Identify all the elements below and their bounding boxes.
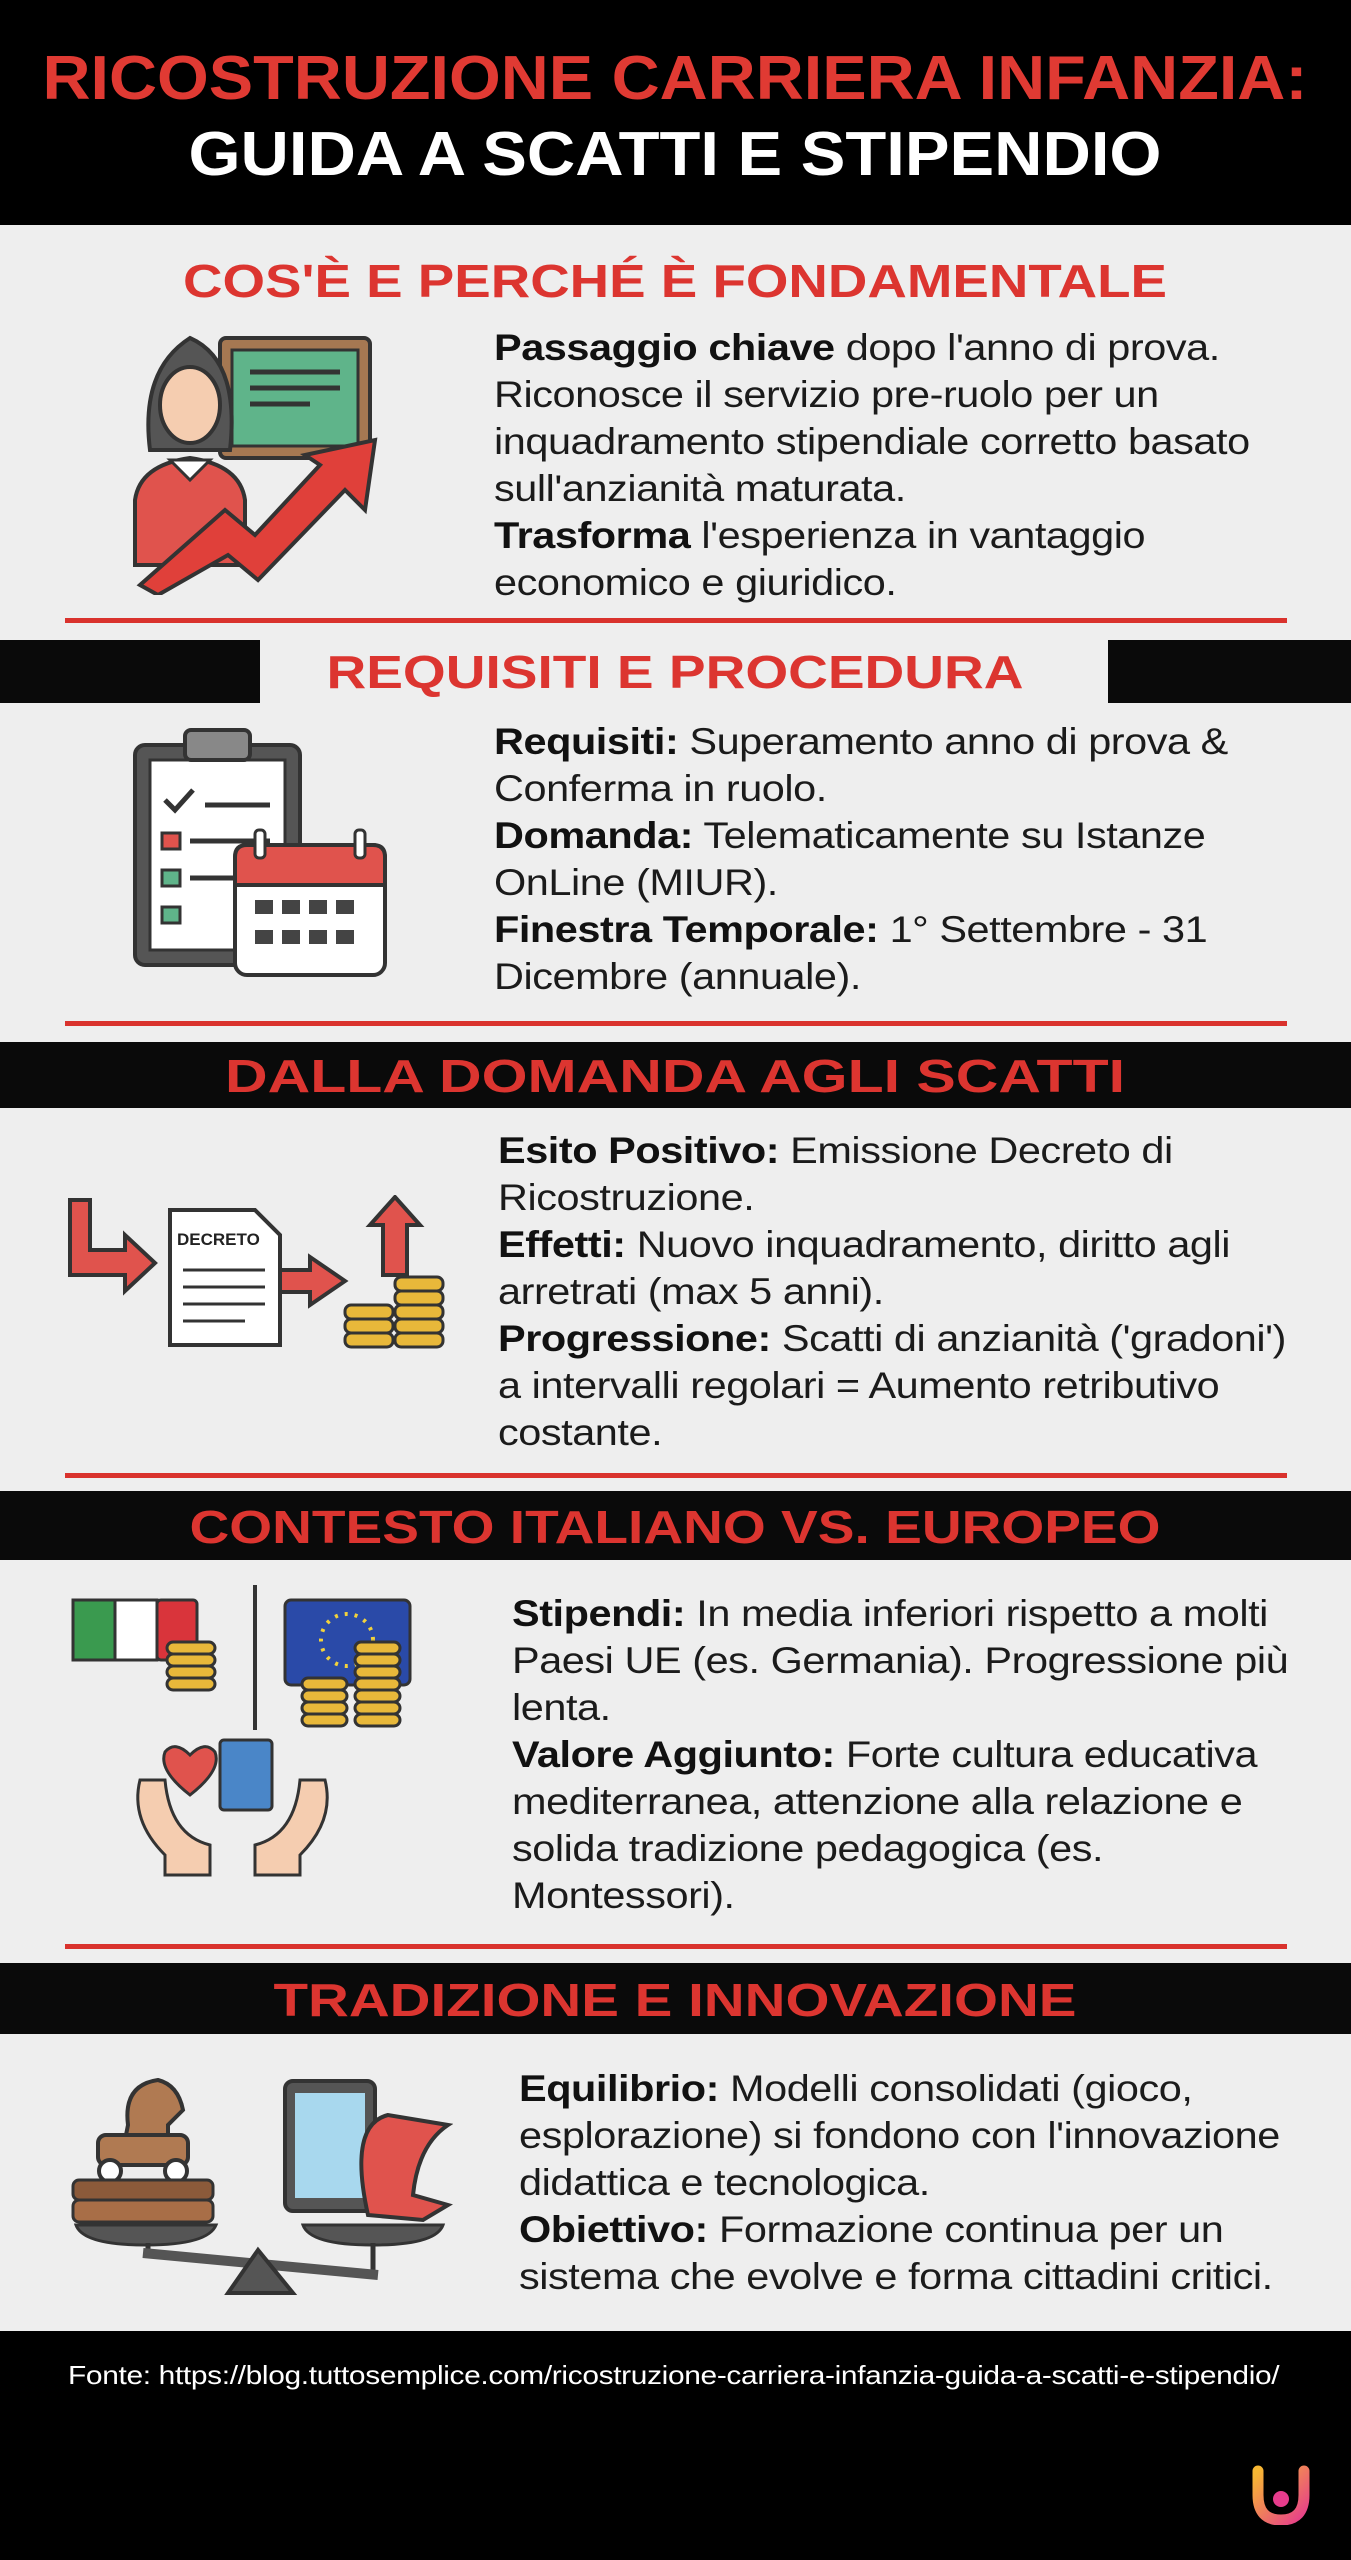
text: tradizione: Obiettivo: Formazione continua per un <box>519 2209 1223 2250</box>
text: tradizione: esplorazione) si fondono con l'innovazione <box>519 2115 1280 2156</box>
text: cos'è <box>494 327 1250 603</box>
text: cos'è: Passaggio chiave dopo l'anno di prova. <box>494 327 1220 368</box>
text: contesto: Valore Aggiunto: Forte cultura educativa <box>512 1734 1257 1775</box>
icon: clipboard and calendar <box>133 728 387 977</box>
text: requisiti: Conferma in ruolo. <box>494 768 827 809</box>
text: contesto: Stipendi: In media inferiori rispetto a molti <box>512 1593 1268 1634</box>
text: requisiti: OnLine (MIUR). <box>494 862 778 903</box>
text: dalla domanda <box>498 1130 1286 1453</box>
text: requisiti: Domanda: Telematicamente su Istanze <box>494 815 1205 856</box>
text: tradizione: sistema che evolve e forma cittadini critici. <box>519 2256 1273 2297</box>
text: dalla domanda: a intervalli regolari = Aumento retributivo <box>498 1365 1219 1406</box>
text: cos'è: Riconosce il servizio pre-ruolo per un <box>494 374 1159 415</box>
text: dalla domanda: Progressione: Scatti di anzianità ('gradoni') <box>498 1318 1286 1359</box>
text: tradizione: didattica e tecnologica. <box>519 2162 930 2203</box>
icon: decreto flow: DECRETO <box>177 1230 260 1249</box>
text: dalla domanda: Effetti: Nuovo inquadramento, diritto agli <box>498 1224 1230 1265</box>
heading: dalla domanda <box>0 1042 1351 1108</box>
text: contesto: Montessori). <box>512 1875 735 1916</box>
heading: contesto <box>0 1491 1351 1560</box>
text: dalla domanda: Ricostruzione. <box>498 1177 754 1218</box>
heading: tradizione: TRADIZIONE E INNOVAZIONE <box>274 1974 1076 2026</box>
text: requisiti: Requisiti: Superamento anno di prova & <box>494 721 1228 762</box>
title: GUIDA A SCATTI E STIPENDIO <box>188 120 1162 189</box>
text: contesto: Paesi UE (es. Germania). Progressione più <box>512 1640 1288 1681</box>
heading: requisiti: REQUISITI E PROCEDURA <box>326 646 1024 698</box>
icon: teacher with board and arrow <box>133 336 378 595</box>
text: contesto: solida tradizione pedagogica (es. <box>512 1828 1103 1869</box>
text: cos'è: sull'anzianità maturata. <box>494 468 906 509</box>
logo <box>1252 2466 1310 2525</box>
text: cos'è: economico e giuridico. <box>494 562 896 603</box>
text: contesto <box>512 1593 1288 1916</box>
text: contesto: mediterranea, attenzione alla relazione e <box>512 1781 1242 1822</box>
text: dalla domanda: costante. <box>498 1412 662 1453</box>
text: cos'è: inquadramento stipendiale corretto basato <box>494 421 1250 462</box>
text: contesto: lenta. <box>512 1687 611 1728</box>
heading: requisiti <box>0 640 1351 703</box>
heading: tradizione <box>0 1963 1351 2034</box>
text: dalla domanda: arretrati (max 5 anni). <box>498 1271 884 1312</box>
text: requisiti <box>494 721 1228 997</box>
icon: decreto flow <box>68 1195 444 1348</box>
text: tradizione: Equilibrio: Modelli consolidati (gioco, <box>519 2068 1192 2109</box>
heading: contesto: CONTESTO ITALIANO VS. EUROPEO <box>190 1501 1160 1553</box>
heading: cos'è: COS'È E PERCHÉ È FONDAMENTALE <box>183 255 1167 307</box>
text: requisiti: Finestra Temporale: 1° Settembre - 31 <box>494 909 1207 950</box>
icon: flags, coins, hands <box>72 1585 412 1876</box>
footer source: Fonte: https://blog.tuttosemplice.com/ricostruzione-carriera-infanzia-guida-a-scatti-e-stipendio/ <box>68 2360 1279 2390</box>
text: cos'è: Trasforma l'esperienza in vantaggio <box>494 515 1145 556</box>
text: requisiti: Dicembre (annuale). <box>494 956 861 997</box>
title: RICOSTRUZIONE CARRIERA INFANZIA: <box>42 44 1308 113</box>
text: dalla domanda: Esito Positivo: Emissione Decreto di <box>498 1130 1173 1171</box>
heading: dalla domanda: DALLA DOMANDA AGLI SCATTI <box>225 1050 1125 1102</box>
title <box>0 0 1351 225</box>
text: tradizione <box>519 2068 1280 2297</box>
icon: balance with toy and tablet <box>72 2078 453 2295</box>
